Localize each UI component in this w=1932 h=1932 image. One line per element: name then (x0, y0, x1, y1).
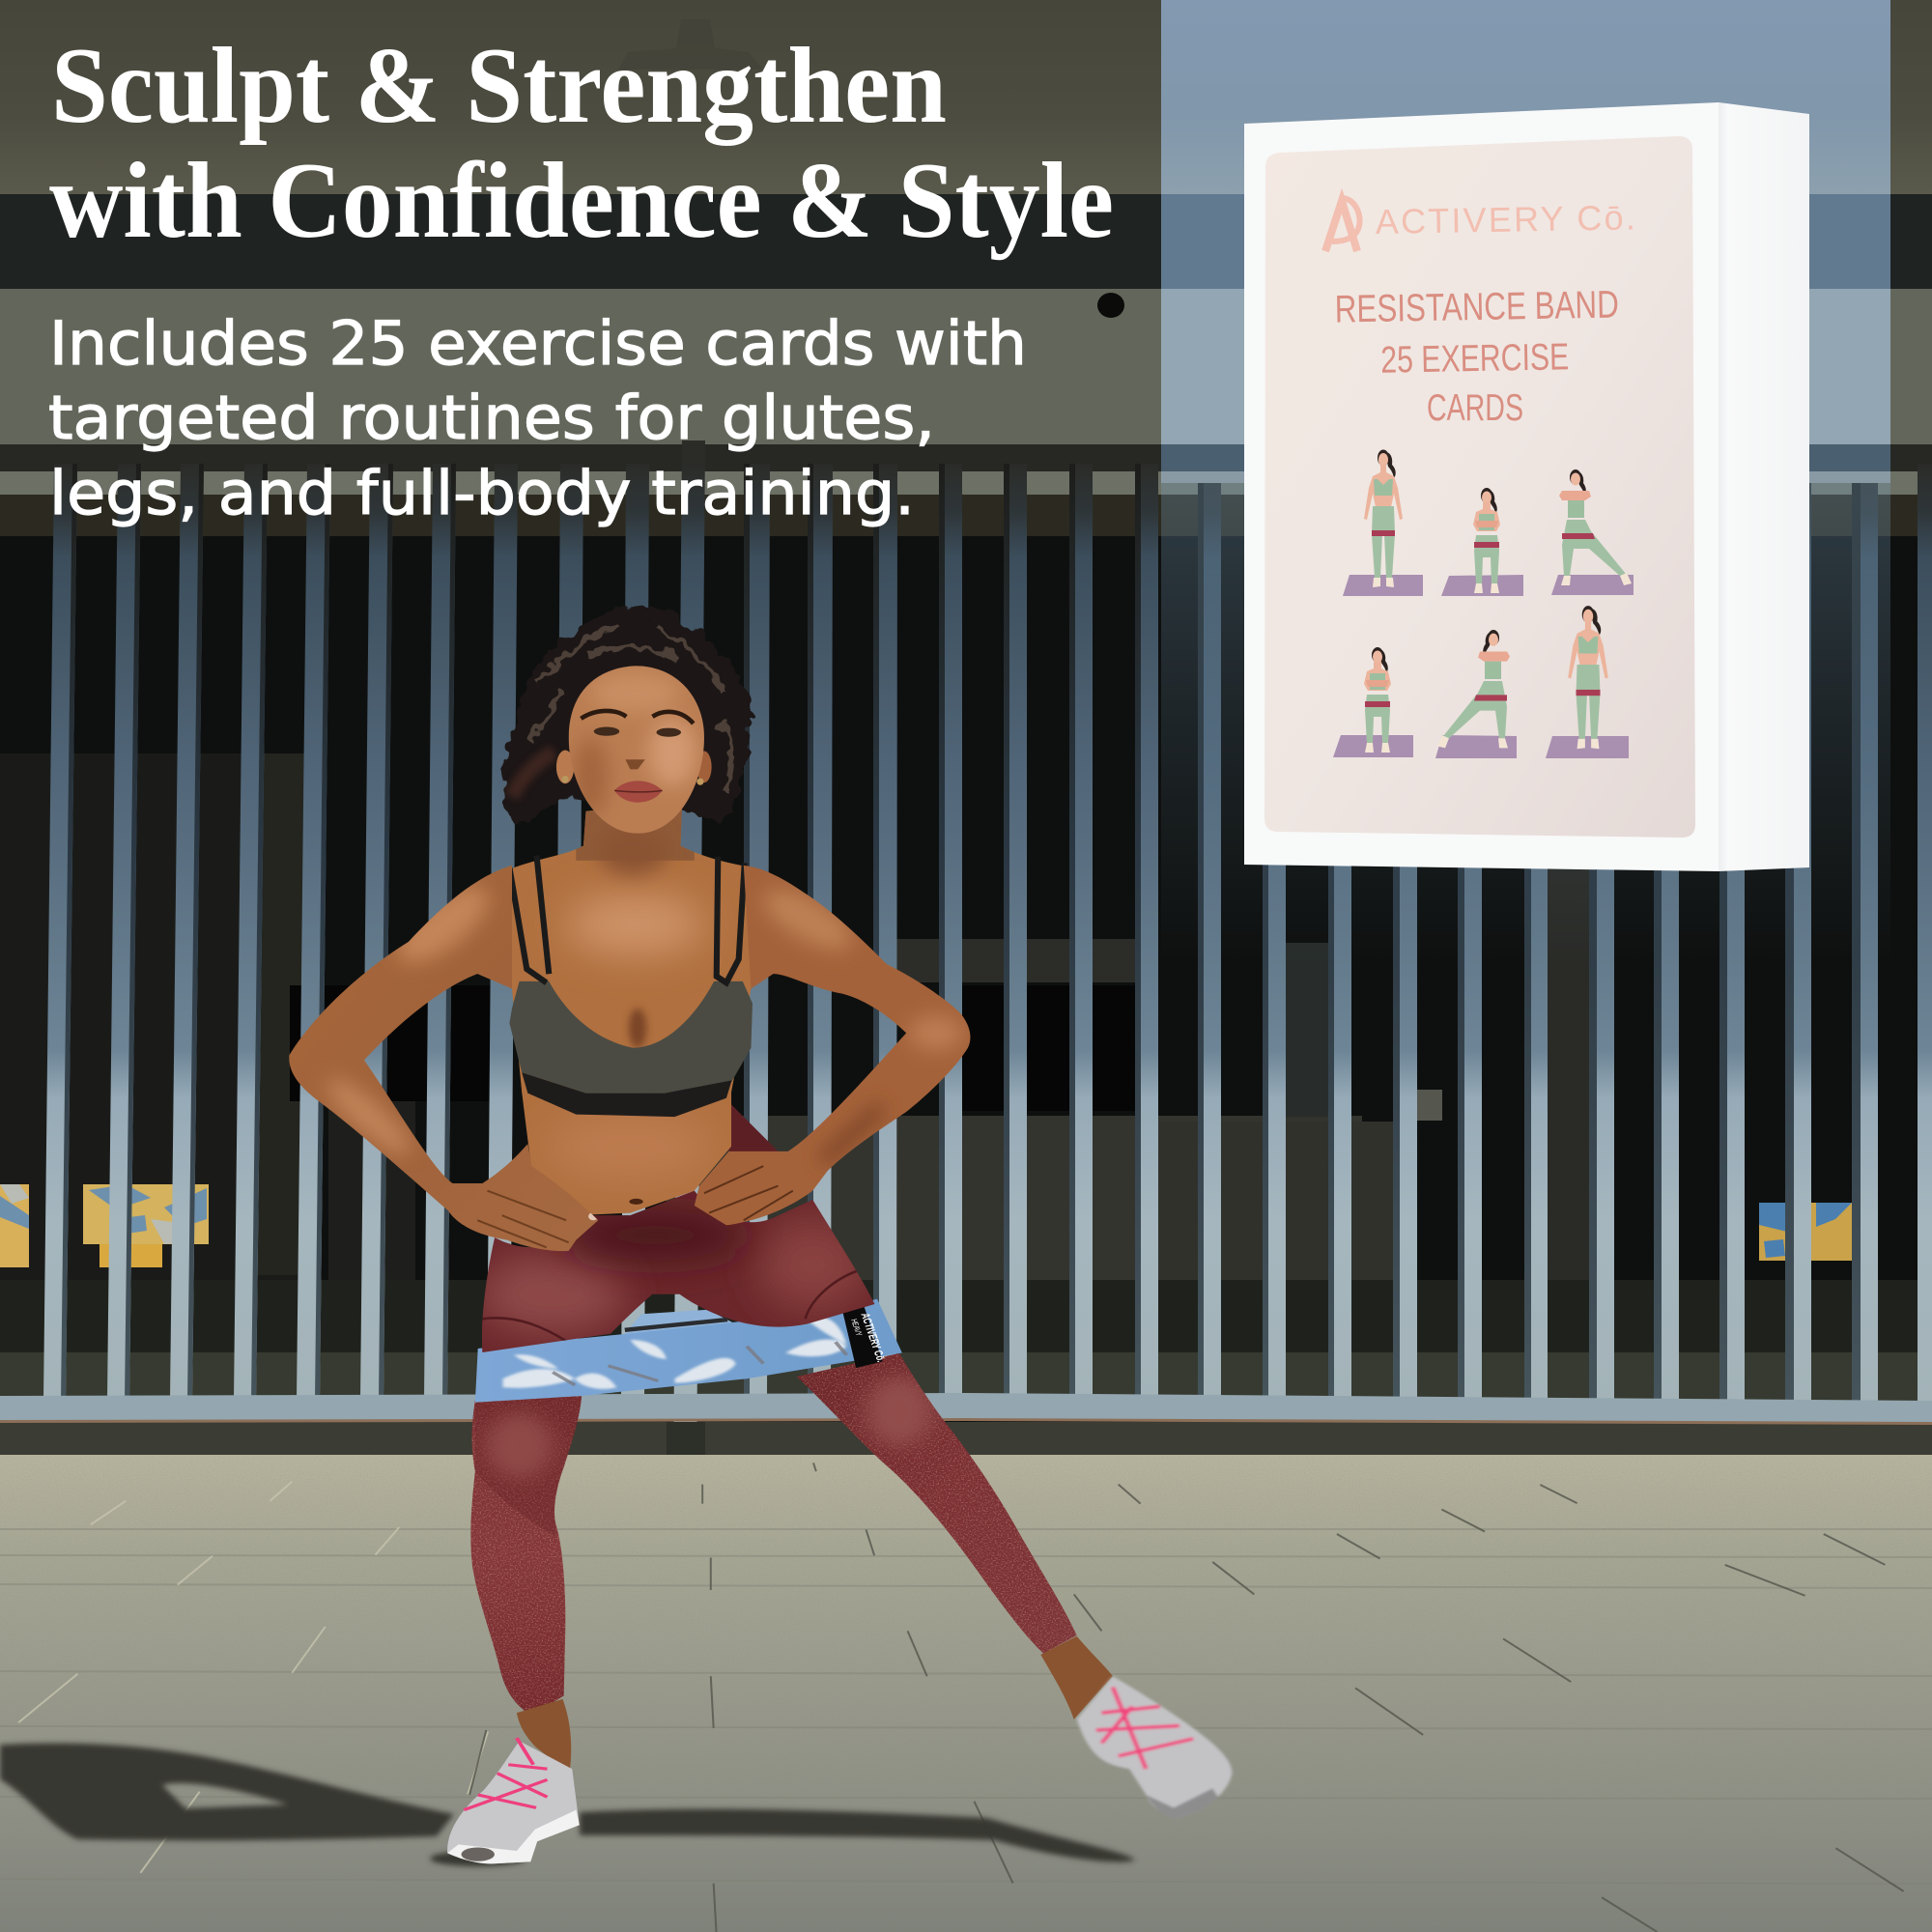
black wall hole (1097, 293, 1124, 318)
poster mosaics behind the fence (0, 1184, 1852, 1267)
band label (842, 1304, 887, 1368)
hips and thighs (477, 1186, 882, 1353)
band: back loop (625, 1310, 733, 1336)
upper body (280, 605, 980, 1353)
subtitle text block: targeted routines for glutes, (48, 383, 935, 453)
band label: HEAVY (849, 1319, 864, 1337)
subtitle text block: legs, and full-body training. (49, 458, 915, 528)
translucent blue panel behind the product box (1161, 0, 1890, 966)
rear hip (728, 1102, 783, 1171)
right leg (791, 1350, 1085, 1657)
left leg (470, 1396, 582, 1711)
ears (556, 751, 712, 785)
box front face (1244, 102, 1719, 871)
hair: rear mass (501, 605, 751, 824)
card title: CARDS (1427, 387, 1523, 429)
fence: bottom rail and pavement edge (0, 1393, 1932, 1472)
card label (1264, 136, 1695, 838)
left shoe (447, 1738, 580, 1863)
band label: ACTIVERY Cō. (858, 1312, 887, 1364)
torso (512, 810, 752, 1215)
cast shadow of the athlete (0, 1744, 1135, 1866)
right arm (690, 861, 980, 1230)
fence: vertical bars (43, 440, 1932, 1473)
face (568, 666, 704, 834)
athlete (280, 605, 1232, 1863)
logo mark (1325, 198, 1359, 251)
card title: 25 EXERCISE (1380, 336, 1570, 382)
subtitle text block (48, 308, 1027, 528)
card title (1334, 283, 1619, 429)
title (49, 26, 1114, 261)
exercise illustrations (1333, 450, 1634, 758)
subtitle text block: Includes 25 exercise cards with (49, 308, 1027, 379)
brand name: ACTIVERY Cō. (1375, 197, 1635, 242)
right shoe (1077, 1676, 1232, 1819)
title: with Confidence & Style (49, 141, 1114, 261)
left arm (280, 861, 606, 1260)
resistance band: front (475, 1299, 902, 1403)
pavement (0, 1455, 1932, 1932)
title: Sculpt & Strengthen (51, 26, 947, 146)
ankles (517, 1636, 1113, 1774)
faint ship silhouettes on the wall top (618, 19, 1848, 89)
product box (1244, 102, 1809, 871)
box side face (1719, 102, 1809, 871)
card title: RESISTANCE BAND (1334, 283, 1619, 331)
sports bra (509, 856, 753, 1117)
legs (447, 1299, 1232, 1863)
